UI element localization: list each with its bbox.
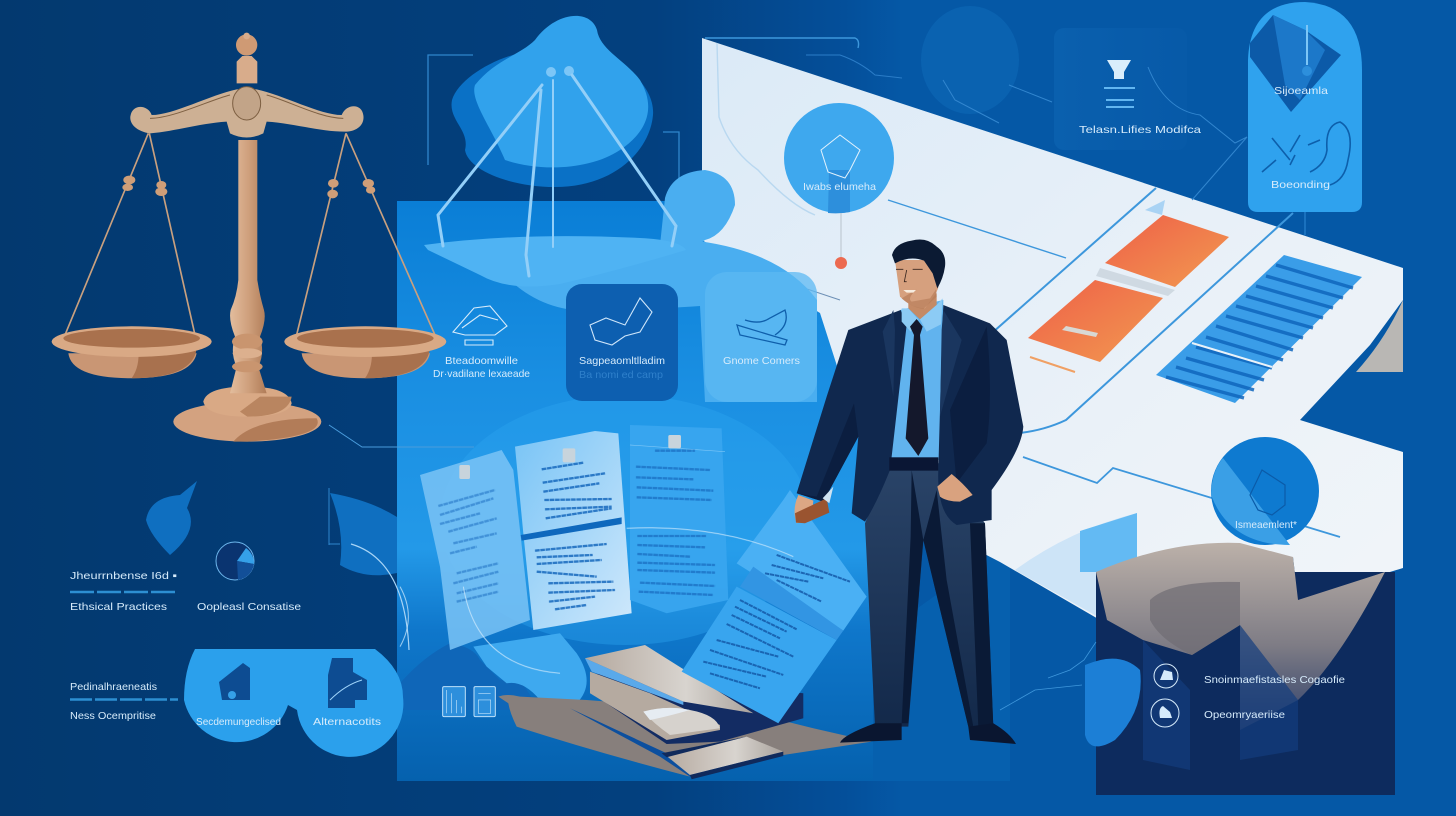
gray underside corner: [1356, 300, 1403, 372]
circle: sheet node: Iwabs elumeha: [803, 181, 876, 193]
left list: top group: Jheurrnbense I6d ▪: [70, 570, 177, 582]
blue central panel: [397, 201, 873, 781]
card: brief panel: Dr·vadilane lexaeade: [433, 368, 530, 380]
card: dark centre: Ba nomi ed camp: [579, 369, 663, 381]
base: [173, 387, 321, 442]
bar chart: orange: [1028, 200, 1229, 372]
card: brief panel: Bteadoomwille: [445, 355, 518, 367]
drop shape left: [146, 481, 197, 555]
left list: top group: [70, 570, 301, 613]
circle and card backdrops top right: [921, 6, 1187, 150]
left list: bottom group: Pedinalhraeneatis: [70, 681, 157, 693]
icon list in dark panel: Opeomryaeriise: [1204, 709, 1285, 721]
circle: sheet node: [784, 103, 894, 269]
card: tall light blue right: Sijoeamla: [1274, 85, 1328, 97]
card: top right dark: [1079, 60, 1201, 136]
card: brief panel: [433, 306, 530, 380]
light hill foreground: [473, 633, 587, 708]
right pan: [284, 326, 446, 378]
dark hill behind documents: [400, 643, 540, 710]
card: dark centre: [566, 284, 678, 401]
left list: top group: Oopleasl Consatise: [197, 601, 301, 613]
twin circle badge: Secdemungeclised: [196, 716, 281, 728]
left pan: [52, 326, 212, 378]
knots: [122, 176, 375, 198]
shirt: [890, 300, 943, 460]
face: [895, 260, 940, 308]
jacket: [797, 305, 1023, 525]
trousers: [865, 463, 993, 727]
strings: [65, 133, 435, 335]
left list: bottom group: Ness Ocempritise: [70, 710, 156, 722]
light blue wave: [513, 170, 817, 402]
facial features: [896, 269, 923, 282]
twin circle badge: Alternacotits: [313, 716, 381, 728]
left list: bottom group: [70, 681, 178, 722]
figure: man in suit: [795, 240, 1023, 744]
shoes: [840, 723, 1016, 744]
document two: [515, 431, 632, 630]
scales of justice: [52, 33, 446, 442]
document one: [420, 450, 530, 650]
blue lower area right of panel: [873, 525, 1010, 781]
panel: dark lower right building: [1000, 543, 1395, 795]
panel-left shape near documents: [329, 425, 474, 650]
faint map lines on sheet: [705, 38, 1340, 537]
pale translucent band on sheet: [1015, 513, 1137, 618]
clips: [459, 435, 681, 479]
hair: [892, 240, 945, 288]
balance plate illustration: [424, 66, 686, 287]
corner brackets: [428, 55, 679, 200]
small file icons: [443, 687, 495, 717]
glow behind documents: [440, 395, 810, 645]
book stack: [498, 645, 872, 779]
left list: top group: Ethsical Practices: [70, 601, 167, 613]
card: tall light blue right: Boeonding: [1271, 179, 1330, 191]
icon list in dark panel: Snoinmaefistasles Cogaofie: [1204, 674, 1345, 686]
documents and books: [400, 425, 872, 779]
card: dark centre: Sagpeaomltlladim: [579, 355, 665, 367]
card: tall light blue right: [1248, 2, 1362, 235]
card: light right: [705, 272, 817, 402]
column: [230, 33, 267, 393]
bar chart: blue: [1156, 255, 1362, 403]
pie icon: [216, 542, 254, 580]
neck: [908, 293, 937, 319]
top abstract blob: [452, 16, 653, 187]
document four: [682, 490, 867, 723]
icon list in dark panel: [1151, 664, 1345, 727]
beam: [130, 87, 364, 137]
circle: lower right node: Ismeaemlent*: [1235, 519, 1297, 531]
card: light right: Gnome Comers: [723, 355, 800, 367]
right hand: [937, 474, 973, 502]
collar and tie: [902, 298, 943, 456]
document text lines: [438, 451, 715, 609]
twin circle badge: [184, 649, 403, 757]
left hand with wallet: [795, 487, 833, 523]
white diagonal sheet: [702, 38, 1403, 620]
circle: lower right node: [1211, 437, 1319, 545]
flowing line across documents: [400, 528, 793, 673]
card: top right dark: Telasn.Lifies Modifca: [1079, 124, 1201, 136]
document three: [630, 425, 728, 613]
